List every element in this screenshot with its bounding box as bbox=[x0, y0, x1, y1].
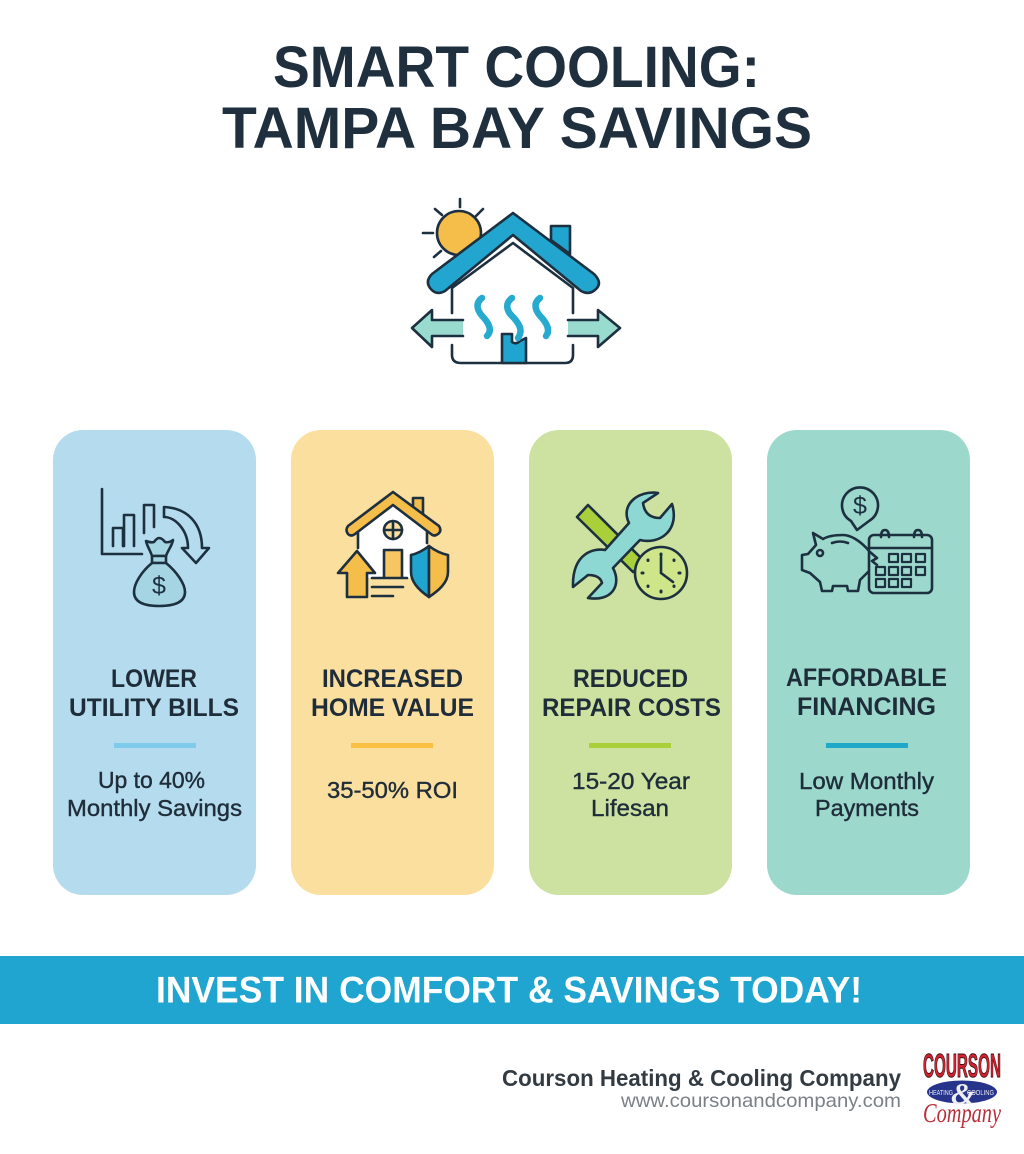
heading bbox=[786, 664, 947, 721]
heading: UTILITY BILLS bbox=[69, 694, 239, 722]
heading: FINANCING bbox=[797, 693, 936, 721]
detail bbox=[67, 767, 242, 821]
card: increased home value bbox=[291, 430, 494, 895]
detail bbox=[572, 768, 690, 821]
title bbox=[222, 35, 812, 161]
icon: house with sun and airflow bbox=[412, 199, 620, 363]
detail: Low Monthly bbox=[799, 768, 935, 794]
divider bbox=[351, 743, 433, 748]
icon: chart and money bag bbox=[102, 489, 209, 606]
title: SMART COOLING: bbox=[273, 35, 760, 100]
heading: REPAIR COSTS bbox=[542, 694, 721, 722]
divider bbox=[589, 743, 671, 748]
logo: Courson Heating & Cooling Company: & bbox=[951, 1076, 975, 1111]
heading: LOWER bbox=[111, 665, 197, 693]
card: affordable financing bbox=[767, 430, 970, 895]
heading: HOME VALUE bbox=[311, 694, 474, 722]
logo: Courson Heating & Cooling Company bbox=[923, 1047, 1001, 1128]
detail bbox=[799, 768, 935, 821]
company name and website: Courson Heating & Cooling Company bbox=[502, 1065, 901, 1091]
sun bbox=[423, 199, 483, 257]
roof bbox=[428, 213, 599, 293]
heading: REDUCED bbox=[573, 665, 688, 693]
icon: piggy bank, calendar and dollar bubble bbox=[802, 487, 932, 593]
detail: Monthly Savings bbox=[67, 795, 242, 821]
card: reduced repair costs bbox=[529, 430, 732, 895]
title: TAMPA BAY SAVINGS bbox=[222, 96, 812, 161]
chimney bbox=[551, 226, 570, 254]
logo: Courson Heating & Cooling Company: Company bbox=[923, 1098, 1001, 1128]
detail: Up to 40% bbox=[98, 767, 205, 793]
house body bbox=[452, 243, 573, 363]
icon: house, arrow and shield bbox=[338, 492, 448, 597]
door bbox=[502, 334, 526, 363]
heading: INCREASED bbox=[322, 665, 463, 693]
icon: wrench, screwdriver and clock bbox=[573, 493, 687, 599]
detail: 35-50% ROI bbox=[327, 777, 458, 803]
detail: Payments bbox=[815, 795, 919, 821]
company name and website: www.coursonandcompany.com bbox=[620, 1090, 901, 1112]
heading: AFFORDABLE bbox=[786, 664, 947, 692]
detail: 15-20 Year bbox=[572, 768, 690, 794]
icon: piggy bank, calendar and dollar bubble: $ bbox=[853, 492, 867, 520]
left arrow bbox=[412, 310, 463, 347]
logo: Courson Heating & Cooling Company: HEATING bbox=[929, 1088, 953, 1097]
right arrow bbox=[568, 310, 620, 347]
logo: Courson Heating & Cooling Company: COOLING bbox=[967, 1088, 994, 1097]
company name and website bbox=[502, 1065, 901, 1112]
heading bbox=[311, 665, 474, 722]
card: lower utility bills bbox=[53, 430, 256, 895]
detail: Lifesan bbox=[591, 795, 669, 821]
icon: chart and money bag: $ bbox=[152, 572, 166, 600]
heat waves bbox=[478, 298, 548, 338]
divider bbox=[826, 743, 908, 748]
heading bbox=[542, 665, 721, 722]
heading bbox=[69, 665, 239, 722]
divider bbox=[114, 743, 196, 748]
call-to-action banner: INVEST IN COMFORT & SAVINGS TODAY! bbox=[156, 970, 862, 1010]
call-to-action banner bbox=[0, 956, 1024, 1024]
